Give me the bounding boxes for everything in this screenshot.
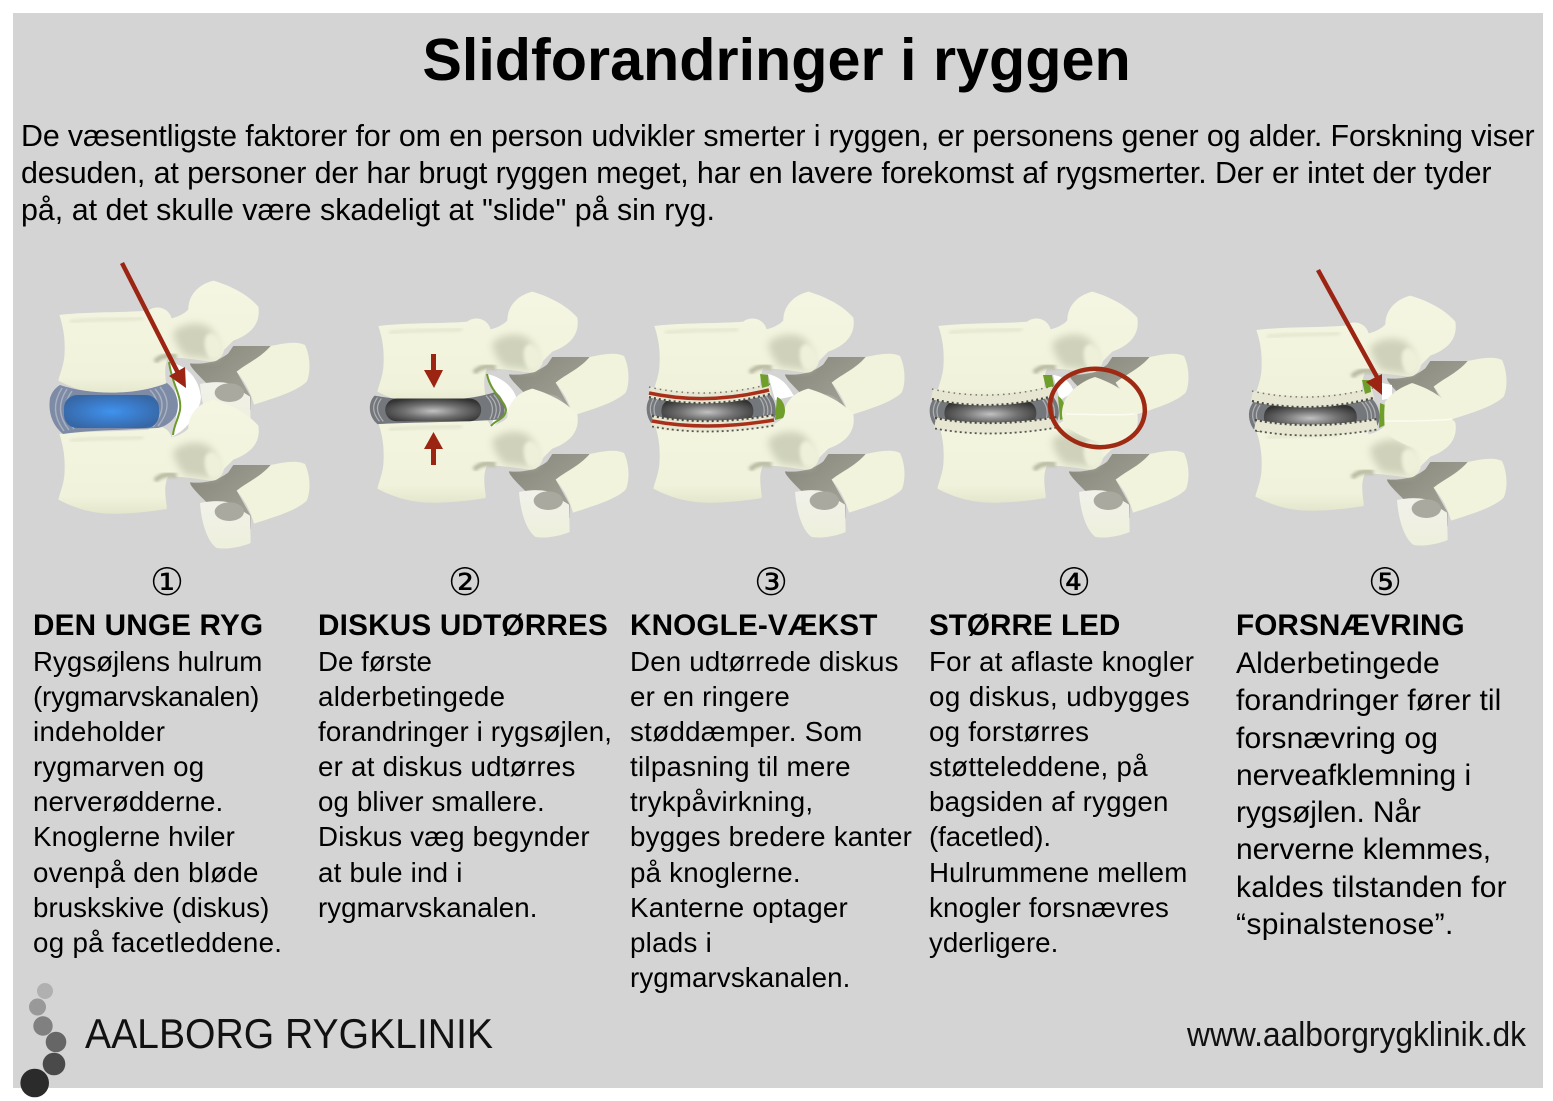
- text: den unge ryg: nerverødderne.: [33, 786, 223, 817]
- text: forsnævring: nerverne klemmes,: [1236, 833, 1491, 866]
- text: knogle-vækst: støddæmper. Som: [630, 716, 863, 747]
- intro text: desuden, at personer der har brugt ryggen meget, har en lavere forekomst af rygsmerter. Der er intet der tyder: [21, 156, 1491, 190]
- text: diskus udtørres: [318, 609, 612, 923]
- intro text: på, at det skulle være skadeligt at "slide" på sin ryg.: [21, 193, 715, 227]
- text: forsnævring: rygsøjlen. Når: [1236, 796, 1421, 829]
- text: større led: (facetled).: [929, 821, 1051, 852]
- text: større led: knogler forsnævres: [929, 892, 1169, 923]
- text: forsnævring: forsnævring og: [1236, 722, 1438, 755]
- enlarged facet joint: [1062, 377, 1137, 443]
- text: diskus udtørres: forandringer i rygsøjlen,: [318, 716, 612, 747]
- text: den unge ryg: [33, 609, 282, 958]
- text: diskus udtørres: DISKUS UDTØRRES: [318, 609, 608, 642]
- website: www.aalborgrygklinik.dk: [1186, 1016, 1527, 1054]
- text: forsnævring: “spinalstenose”.: [1236, 908, 1454, 941]
- text: knogle-vækst: bygges bredere kanter: [630, 821, 912, 852]
- text: knogle-vækst: trykpåvirkning,: [630, 786, 813, 817]
- text: større led: og diskus, udbygges: [929, 681, 1190, 712]
- text: forsnævring: forandringer fører til: [1236, 684, 1501, 717]
- text: den unge ryg: Knoglerne hviler: [33, 821, 235, 852]
- text: knogle-vækst: Kanterne optager: [630, 892, 848, 923]
- illustration 1: young spine: [50, 262, 309, 549]
- intro text: De væsentligste faktorer for om en person udvikler smerter i ryggen, er personens gener og alder. Forskning viser: [21, 119, 1535, 153]
- text: den unge ryg: indeholder: [33, 716, 165, 747]
- text: den unge ryg: rygmarven og: [33, 751, 204, 782]
- number 3: ③: [754, 560, 788, 604]
- text: forsnævring: kaldes tilstanden for: [1236, 871, 1507, 904]
- logo: clinic name: AALBORG RYGKLINIK: [85, 1010, 493, 1057]
- illustration 4: larger facet joint: [930, 292, 1188, 538]
- logo: clinic dots: [20, 983, 66, 1097]
- text: diskus udtørres: er at diskus udtørres: [318, 751, 576, 782]
- bone edge highlights: [649, 390, 774, 426]
- text: knogle-vækst: [630, 609, 912, 993]
- text: den unge ryg: DEN UNGE RYG: [33, 609, 263, 642]
- text: den unge ryg: Rygsøjlens hulrum: [33, 646, 262, 677]
- number 5: ⑤: [1368, 560, 1402, 604]
- text: diskus udtørres: alderbetingede: [318, 681, 505, 712]
- text: forsnævring: nerveafklemning i: [1236, 759, 1471, 792]
- text: større led: For at aflaste knogler: [929, 646, 1194, 677]
- text: den unge ryg: bruskskive (diskus): [33, 892, 269, 923]
- illustration 3: bone growth: [647, 292, 904, 538]
- text: knogle-vækst: er en ringere: [630, 681, 790, 712]
- text: den unge ryg: ovenpå den bløde: [33, 857, 259, 888]
- text: større led: og forstørres: [929, 716, 1089, 747]
- illustration 5: narrowing: [1249, 269, 1506, 546]
- text: større led: [929, 609, 1194, 958]
- number 4: ④: [1057, 560, 1091, 604]
- text: forsnævring: [1236, 609, 1507, 941]
- text: større led: Hulrummene mellem: [929, 857, 1187, 888]
- number 1: ①: [150, 560, 184, 604]
- text: diskus udtørres: at bule ind i: [318, 857, 463, 888]
- text: knogle-vækst: Den udtørrede diskus: [630, 646, 899, 677]
- text: større led: bagsiden af ryggen: [929, 786, 1169, 817]
- text: knogle-vækst: KNOGLE-VÆKST: [630, 609, 878, 642]
- text: diskus udtørres: rygmarvskanalen.: [318, 892, 537, 923]
- arrows: compression: [424, 354, 443, 465]
- text: forsnævring: Alderbetingede: [1236, 647, 1440, 680]
- intro text: [21, 119, 1535, 227]
- text: større led: STØRRE LED: [929, 609, 1120, 642]
- arrow: red pointer to narrowed canal: [1316, 269, 1382, 395]
- text: forsnævring: FORSNÆVRING: [1236, 609, 1465, 642]
- arrow: red pointer to spinal canal: [120, 262, 186, 388]
- text: knogle-vækst: tilpasning til mere: [630, 751, 851, 782]
- text: den unge ryg: og på facetleddene.: [33, 927, 282, 958]
- text: knogle-vækst: plads i: [630, 927, 712, 958]
- text: knogle-vækst: på knoglerne.: [630, 857, 801, 888]
- text: knogle-vækst: rygmarvskanalen.: [630, 962, 850, 993]
- enlarged facet joint: [1384, 383, 1454, 452]
- title: Slidforandringer i ryggen: [422, 26, 1131, 93]
- illustration 2: disc dries out: [370, 292, 628, 538]
- text: diskus udtørres: De første: [318, 646, 432, 677]
- text: større led: yderligere.: [929, 927, 1058, 958]
- text: diskus udtørres: Diskus væg begynder: [318, 821, 590, 852]
- text: den unge ryg: (rygmarvskanalen): [33, 681, 259, 712]
- number 2: ②: [448, 560, 482, 604]
- text: større led: støtteleddene, på: [929, 751, 1148, 782]
- text: diskus udtørres: og bliver smallere.: [318, 786, 545, 817]
- circle highlight on facet joint: [1045, 363, 1150, 453]
